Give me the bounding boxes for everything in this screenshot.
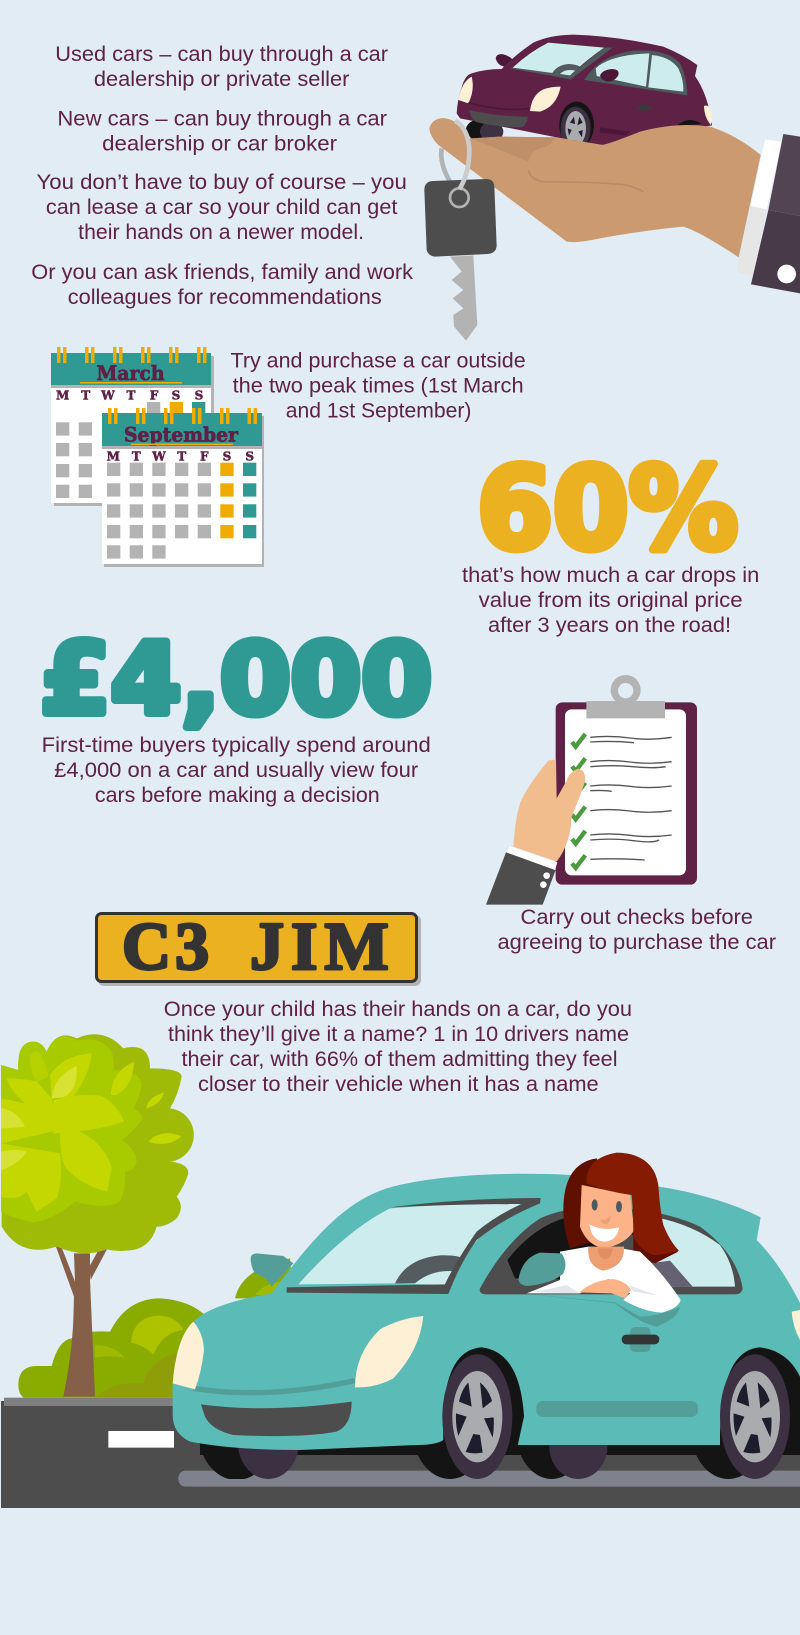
headlights and bumper (173, 1310, 800, 1436)
text: naming the car: think they’ll give it a name? 1 in 10 drivers name (168, 1023, 629, 1046)
icon: September calendar: T (132, 449, 141, 463)
text: where to buy a car: Used cars – can buy through a car (55, 43, 388, 66)
side strip (536, 1401, 698, 1417)
number plate: C3 JIM: JIM (250, 908, 396, 984)
text: carry out checks: agreeing to purchase the car (498, 931, 776, 954)
icon: March calendar: M (56, 388, 69, 402)
number plate: C3 JIM: C3 (122, 908, 213, 984)
icon: March calendar: T (127, 388, 136, 402)
icon: March calendar: S (195, 388, 203, 402)
icon: holding hand (486, 759, 585, 905)
icon: hand holding a purple car and key (424, 35, 800, 341)
illustration: teal car with smiling driver (173, 1153, 800, 1487)
text: naming the car: Once your child has their hands on a car, do you (164, 998, 632, 1021)
text: where to buy a car: dealership or car broker (102, 132, 337, 156)
text: carry out checks: Carry out checks before (520, 906, 753, 929)
icon: clipboard (556, 675, 697, 885)
icon: September calendar: S (245, 449, 254, 463)
text: where to buy a car (31, 43, 414, 309)
bushes (18, 1258, 293, 1398)
door shadow and mirror (518, 1253, 680, 1327)
wheels and underbody (200, 1440, 800, 1479)
illustration: road, tree and bushes (1, 1034, 800, 1508)
icon: March calendar: March (96, 361, 165, 385)
text: first-time buyers: £4,000 on a car and usually view four (54, 759, 418, 782)
icon: March calendar: S (172, 388, 180, 402)
icon: September calendar: S (223, 449, 231, 463)
text: peak times advice: the two peak times (1st March (233, 374, 524, 398)
tree (1, 1034, 194, 1397)
text: where to buy a car: can lease a car so your child can get (46, 196, 398, 219)
icon: March calendar: T (81, 388, 90, 402)
driver (527, 1153, 681, 1313)
text: value drop: after 3 years on the road! (488, 614, 731, 637)
text: where to buy a car: New cars – can buy through a car (57, 108, 387, 130)
text: where to buy a car: You don’t have to buy of course – you (36, 171, 407, 194)
car body (173, 1174, 800, 1450)
front and rear wheels (442, 1347, 800, 1479)
icon: September calendar: M (107, 449, 120, 463)
icon: hand (429, 118, 761, 257)
road stripe under car (178, 1471, 800, 1487)
text: where to buy a car: Or you can ask friends, family and work (31, 261, 414, 284)
text: naming the car (164, 998, 632, 1096)
text: naming the car: their car, with 66% of them admitting they feel (182, 1048, 618, 1071)
text: first-time buyers: First-time buyers typically spend around (42, 734, 431, 757)
icon: car key (424, 121, 497, 341)
icon: September calendar: W (151, 449, 166, 463)
icon: September calendar: September (124, 423, 238, 447)
text: where to buy a car: their hands on a newer model. (78, 221, 364, 244)
icon: hand holding clipboard (486, 675, 697, 905)
icon: March and September calendars (51, 347, 264, 567)
text: first-time buyers: cars before making a decision (95, 784, 380, 807)
road (1, 1398, 800, 1508)
text: peak times advice: and 1st September) (286, 400, 471, 422)
icon: March calendar: W (100, 388, 115, 402)
door handle (622, 1327, 659, 1352)
side window (480, 1207, 743, 1294)
icon: September calendar (102, 408, 264, 567)
big number: 60%: 60% (477, 443, 738, 575)
icon: March calendar (51, 347, 214, 506)
text: value drop (462, 564, 759, 637)
text: carry out checks (498, 906, 776, 954)
driver-side mirror (251, 1253, 293, 1287)
icon: September calendar: F (200, 449, 209, 463)
icon: suit cuff (736, 134, 800, 293)
big number: £4,000: £4,000 (40, 623, 432, 737)
text: peak times advice (230, 350, 526, 422)
number plate: C3 JIM (96, 908, 421, 986)
text: first-time buyers (42, 734, 431, 807)
icon: purple car (457, 35, 712, 150)
text: naming the car: closer to their vehicle when it has a name (198, 1073, 599, 1096)
text: where to buy a car: colleagues for recommendations (68, 286, 382, 309)
text: where to buy a car: dealership or private seller (94, 68, 349, 91)
icon: March calendar: F (150, 388, 159, 402)
windscreen (287, 1198, 541, 1294)
icon: September calendar: T (177, 449, 186, 463)
text: peak times advice: Try and purchase a car outside (230, 350, 526, 372)
text: value drop: value from its original price (479, 589, 743, 612)
text: value drop: that’s how much a car drops in (462, 564, 759, 587)
